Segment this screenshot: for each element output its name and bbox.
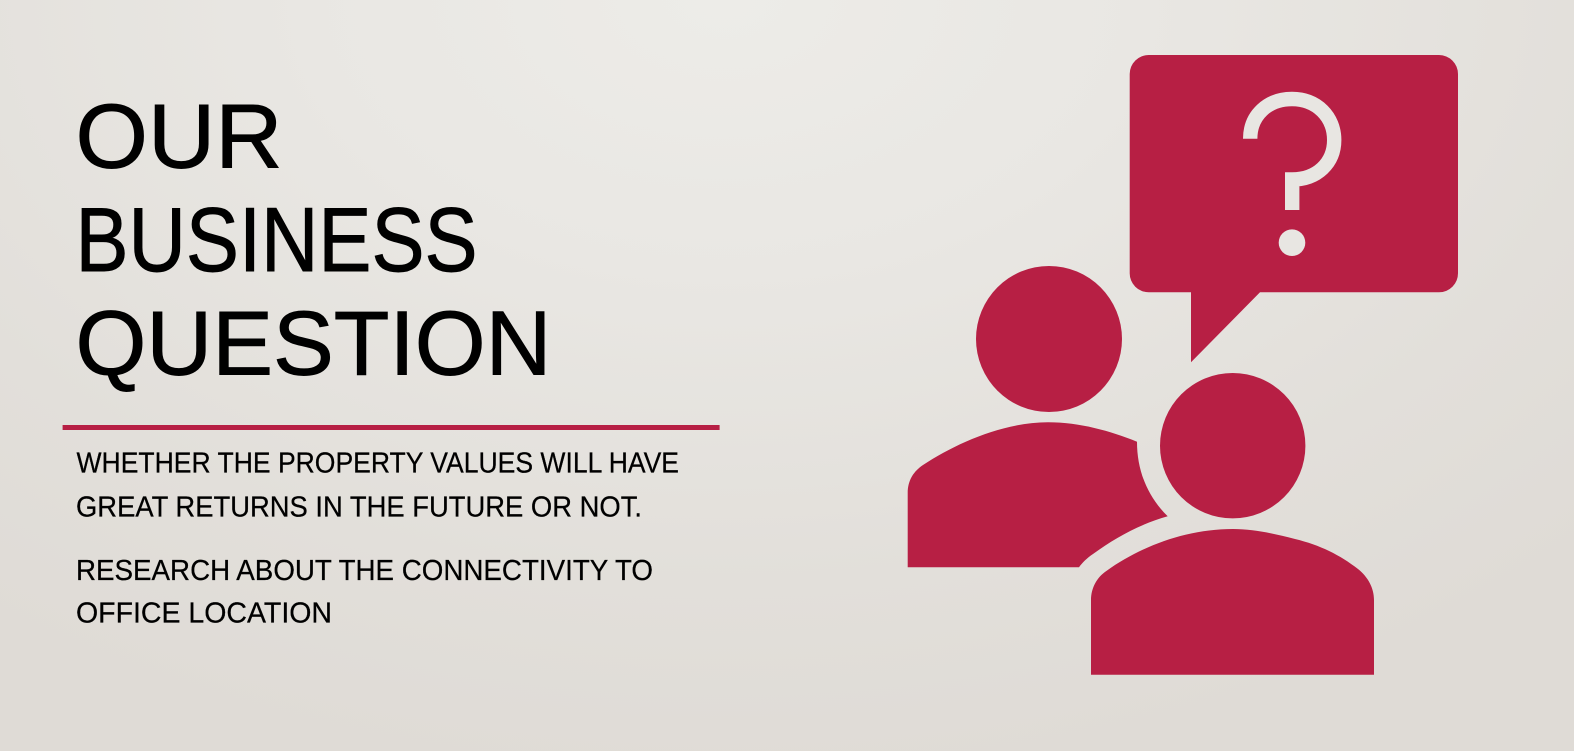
icon: back person — [908, 266, 1168, 567]
body text: GREAT RETURNS IN THE FUTURE OR NOT. — [76, 492, 642, 524]
title: Our Business Question — [76, 87, 552, 395]
title: Our Business Question: BUSINESS — [76, 190, 478, 291]
icon: front person — [1091, 373, 1374, 675]
body text: OFFICE LOCATION — [76, 598, 332, 630]
body text — [76, 447, 679, 630]
icon: question mark — [1250, 99, 1334, 256]
icon: speech bubble — [1130, 55, 1458, 362]
divider rule — [63, 425, 720, 430]
title: Our Business Question: OUR — [76, 87, 282, 188]
body text: RESEARCH ABOUT THE CONNECTIVITY TO — [76, 555, 653, 587]
title: Our Business Question: QUESTION — [76, 294, 552, 395]
icon: two people with question speech bubble — [908, 55, 1458, 675]
body text: WHETHER THE PROPERTY VALUES WILL HAVE — [76, 447, 679, 479]
